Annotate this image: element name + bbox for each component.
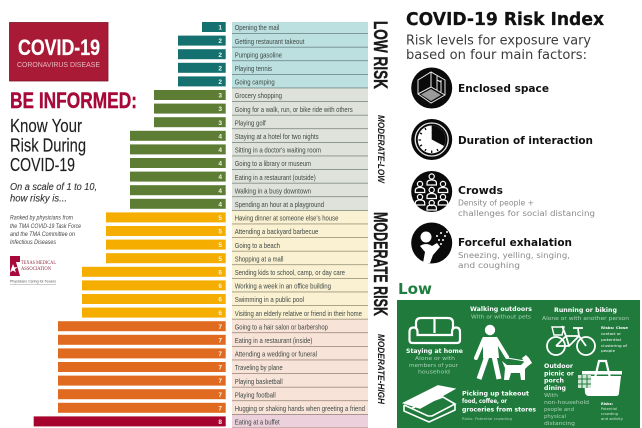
text block: walking outdoors: Walking outdoors (470, 305, 532, 313)
text block: forceful exhalation: Forceful exhalation (458, 236, 572, 249)
text block: intro: based on four main factors: (406, 48, 587, 63)
text block: outdoor picnic: physical (544, 414, 566, 420)
row: Staying at a hotel for two nights: 4 (218, 133, 222, 140)
text block: intro: Risk levels for exposure vary (406, 34, 591, 49)
row: Spending an hour at a playground (130, 199, 368, 211)
text block: staying at home: household (418, 370, 450, 376)
row: Attending a backyard barbecue: Attending a backyard barbecue (235, 227, 318, 236)
text block: running or biking: Running or biking (554, 306, 617, 314)
text block: walking outdoors: With or without pets (471, 314, 531, 320)
text block: ranking source: and the TMA Committee on (10, 232, 76, 238)
text block: crowds: Crowds (458, 184, 503, 197)
icon: duration clock (411, 119, 452, 160)
text block: outdoor picnic (544, 362, 589, 427)
row: Swimming in a public pool: Swimming in a public pool (235, 295, 304, 304)
text block: outdoor picnic: porch (544, 376, 564, 384)
text block: crowds: Density of people + (458, 199, 534, 208)
text block: walking outdoors (470, 305, 532, 320)
label: low risk: LOW RISK (369, 21, 390, 89)
row: Playing basketball (58, 376, 368, 388)
logo: Texas Medical Association: TEXAS MEDICAL (21, 261, 56, 266)
row: Spending an hour at a playground: Spending an hour at a playground (235, 200, 324, 209)
text block: forceful exhalation (458, 236, 572, 270)
row: Opening the mail: Opening the mail (235, 23, 280, 32)
row: Pumping gasoline: Pumping gasoline (235, 50, 282, 59)
row: Sending kids to school, camp, or day care: Sending kids to school, camp, or day care (235, 268, 345, 277)
row: Traveling by plane: Traveling by plane (235, 363, 283, 372)
heading: Know your risk during COVID-19: Know Your (10, 115, 82, 136)
row: Going for a walk, run, or bike ride with others: Going for a walk, run, or bike ride with others (235, 105, 353, 114)
icon: bicycle (547, 326, 595, 355)
row: Eating at a buffet: 8 (218, 419, 222, 426)
text block: outdoor picnic: dining (544, 384, 566, 392)
text block: crowds (458, 184, 595, 218)
text block: forceful exhalation: Sneezing, yelling, singing, (458, 251, 570, 260)
text block: picking up takeout: Picking up takeout (462, 390, 529, 398)
row: Visiting an elderly relative or friend in their home: Visiting an elderly relative or friend in their home (235, 309, 362, 318)
heading: Know your risk during COVID-19: COVID-19 (10, 154, 75, 175)
row: Going to a hair salon or barbershop: Going to a hair salon or barbershop (235, 322, 328, 331)
row: Opening the mail (202, 22, 368, 34)
row: Spending an hour at a playground: 4 (218, 201, 222, 208)
row: Going to a hair salon or barbershop (58, 321, 368, 333)
row: Hugging or shaking hands when greeting a friend: Hugging or shaking hands when greeting a friend (235, 404, 365, 413)
heading: Low: Low (398, 280, 432, 298)
text block: running or biking: Alone or with another person (542, 316, 630, 322)
text block: intro (406, 34, 591, 63)
row: Going to a beach: Going to a beach (235, 241, 280, 250)
row: Working a week in an office building: Working a week in an office building (235, 282, 331, 291)
icon: enclosed space (411, 68, 452, 108)
row: Shopping at a mall: Shopping at a mall (235, 254, 284, 263)
icon: crowds (411, 171, 452, 212)
row: Getting restaurant takeout: Getting restaurant takeout (235, 37, 304, 46)
logo: Texas Medical Association (10, 256, 56, 284)
text block: staying at home (406, 347, 464, 376)
row: Playing tennis: 2 (218, 65, 222, 72)
text block: bicycle risks: Risks: Close (601, 325, 628, 330)
text block: picnic risks: Potential (601, 406, 617, 411)
icon: pizza box (404, 386, 455, 422)
row: Going for a walk, run, or bike ride with others (154, 104, 368, 116)
text block: picnic risks (601, 401, 624, 421)
row: Eating at a buffet: Eating at a buffet (235, 418, 280, 427)
row: Traveling by plane: 7 (218, 365, 222, 372)
text block: outdoor picnic: With (544, 393, 559, 399)
text block: running or biking (542, 306, 630, 322)
row: Eating at a buffet (34, 416, 368, 428)
text block: ranking source: Infectious Diseases (10, 240, 56, 246)
row: Eating in a restaurant (inside): Eating in a restaurant (inside) (235, 336, 312, 345)
text block: bicycle risks: clustering of (601, 343, 628, 348)
text block: scale question (10, 182, 97, 205)
text block: picking up takeout: Risks: Potential crowding (462, 416, 513, 421)
text block: outdoor picnic: distancing (544, 421, 575, 427)
row: Having dinner at someone else's house: 5 (218, 215, 222, 222)
row: Sitting in a doctor's waiting room (130, 144, 368, 156)
label: moderate-low: MODERATE-LOW (375, 115, 386, 184)
icon: picnic basket (578, 361, 622, 396)
heading: Know your risk during COVID-19 (10, 115, 86, 175)
logo: Texas Medical Association: Physicians Caring for Texans (10, 278, 56, 284)
text block: picking up takeout (462, 390, 536, 421)
row: Going camping: Going camping (235, 78, 275, 87)
row: Going camping (178, 76, 368, 88)
text block: scale question: how risky is... (10, 194, 67, 205)
title: COVID-19 Risk Index: COVID-19 Risk Index (406, 10, 605, 30)
row: Sending kids to school, camp, or day care (82, 267, 368, 279)
chart: risk ranking bars and activities (34, 22, 368, 428)
row: Eating in a restaurant (outside) (130, 172, 368, 184)
row: Going to a library or museum (130, 158, 368, 170)
text block: outdoor picnic: Outdoor (544, 362, 574, 370)
row: Sitting in a doctor's waiting room: 4 (218, 147, 222, 154)
row: Grocery shopping (154, 90, 368, 102)
row: Eating in a restaurant (outside): Eating in a restaurant (outside) (235, 173, 316, 182)
row: Playing football: Playing football (235, 390, 276, 399)
text block: outdoor picnic: people and (544, 407, 574, 413)
row: Walking in a busy downtown (130, 185, 368, 197)
row: Having dinner at someone else's house (106, 212, 368, 224)
row: Walking in a busy downtown: 4 (218, 188, 222, 195)
row: Playing basketball: Playing basketball (235, 377, 283, 386)
panel: COVID-19 badge: COVID-19 (18, 35, 100, 60)
row: Working a week in an office building (82, 280, 368, 292)
row: Attending a wedding or funeral: Attending a wedding or funeral (235, 350, 317, 359)
text block: outdoor picnic: non-household (544, 400, 589, 406)
row: Opening the mail: 1 (218, 25, 222, 32)
row: Staying at a hotel for two nights (130, 131, 368, 143)
text block: bicycle risks: potential (601, 337, 621, 342)
row: Shopping at a mall: 5 (218, 256, 222, 263)
row: Playing golf: 3 (218, 120, 222, 127)
icon: sofa (410, 318, 460, 343)
row: Playing golf: Playing golf (235, 118, 266, 127)
text block: staying at home: Staying at home (406, 347, 464, 355)
row: Visiting an elderly relative or friend in their home (82, 308, 368, 320)
text block: bicycle risks (601, 325, 628, 353)
text block: ranking source: the TMA COVID-19 Task Force (10, 224, 82, 230)
row: Going to a library or museum: Going to a library or museum (235, 159, 311, 168)
row: Hugging or shaking hands when greeting a friend: 7 (218, 405, 222, 412)
logo: Texas Medical Association: ASSOCIATION (21, 267, 52, 272)
row: Going to a beach: 5 (218, 242, 222, 249)
row: Going for a walk, run, or bike ride with others: 3 (218, 106, 222, 113)
row: Getting restaurant takeout (178, 36, 368, 48)
row: Playing tennis (178, 63, 368, 75)
row: Walking in a busy downtown: Walking in a busy downtown (235, 186, 311, 195)
text block: staying at home: Alone or with (415, 356, 456, 362)
text block: ranking source (10, 216, 82, 246)
row: Traveling by plane (58, 362, 368, 374)
row: Sitting in a doctor's waiting room: Sitting in a doctor's waiting room (235, 146, 321, 155)
row: Eating in a restaurant (outside): 4 (218, 174, 222, 181)
text block: bicycle risks: people (601, 348, 616, 353)
row: Playing football: 7 (218, 392, 222, 399)
row: Staying at a hotel for two nights: Staying at a hotel for two nights (235, 132, 319, 141)
label: duration of interaction: Duration of interaction (458, 135, 593, 147)
heading: Be informed: BE INFORMED: (10, 88, 137, 113)
label: moderate-high: MODERATE-HIGH (375, 334, 386, 405)
text block: staying at home: members of your (409, 363, 459, 369)
row: Attending a wedding or funeral (58, 348, 368, 360)
row: Grocery shopping: Grocery shopping (235, 91, 282, 100)
panel: COVID-19 badge (10, 22, 108, 81)
label: moderate risk: MODERATE RISK (369, 212, 390, 316)
row: Visiting an elderly relative or friend in their home: 6 (218, 310, 222, 317)
row: Going to a library or museum: 4 (218, 161, 222, 168)
row: Pumping gasoline (178, 49, 368, 61)
row: Hugging or shaking hands when greeting a friend (58, 403, 368, 415)
text block: crowds: challenges for social distancing (458, 209, 595, 218)
row: Shopping at a mall (106, 253, 368, 265)
row: Going to a hair salon or barbershop: 7 (218, 324, 222, 331)
text block: bicycle risks: contact or (601, 331, 621, 336)
text block: picking up takeout: groceries from stores (462, 406, 536, 414)
row: Eating in a restaurant (inside): 7 (218, 337, 222, 344)
panel: low risk activities (397, 300, 640, 428)
row: Having dinner at someone else's house: Having dinner at someone else's house (235, 214, 338, 223)
heading: Know your risk during COVID-19: Risk During (10, 135, 86, 156)
row: Swimming in a public pool: 6 (218, 297, 222, 304)
row: Eating in a restaurant (inside) (58, 335, 368, 347)
row: Going camping: 2 (218, 79, 222, 86)
row: Pumping gasoline: 2 (218, 52, 222, 59)
row: Going to a beach (106, 240, 368, 252)
row: Grocery shopping: 3 (218, 93, 222, 100)
row: Swimming in a public pool (82, 294, 368, 306)
row: Attending a wedding or funeral: 7 (218, 351, 222, 358)
row: Getting restaurant takeout: 2 (218, 38, 222, 45)
text block: picnic risks: and activity (601, 416, 624, 421)
text block: scale question: On a scale of 1 to 10, (10, 182, 97, 193)
panel: COVID-19 badge: CORONAVIRUS DISEASE (17, 60, 100, 69)
row: Attending a backyard barbecue: 5 (218, 229, 222, 236)
label: enclosed space: Enclosed space (458, 83, 549, 95)
text block: outdoor picnic: picnic or (544, 370, 575, 378)
row: Sending kids to school, camp, or day care: 6 (218, 269, 222, 276)
text block: forceful exhalation: and coughing (458, 261, 520, 270)
row: Playing golf (154, 117, 368, 129)
row: Playing tennis: Playing tennis (235, 64, 272, 73)
text block: ranking source: Ranked by physicians from (10, 216, 73, 222)
row: Attending a backyard barbecue (106, 226, 368, 238)
icon: person walking dog (476, 325, 532, 380)
text block: picking up takeout: food, coffee, or (462, 397, 508, 405)
text block: picnic risks: Risks: (601, 401, 613, 406)
row: Playing football (58, 389, 368, 401)
row: Playing basketball: 7 (218, 378, 222, 385)
text block: picnic risks: crowding (601, 411, 619, 416)
row: Working a week in an office building: 6 (218, 283, 222, 290)
icon: forceful exhalation (411, 222, 452, 264)
